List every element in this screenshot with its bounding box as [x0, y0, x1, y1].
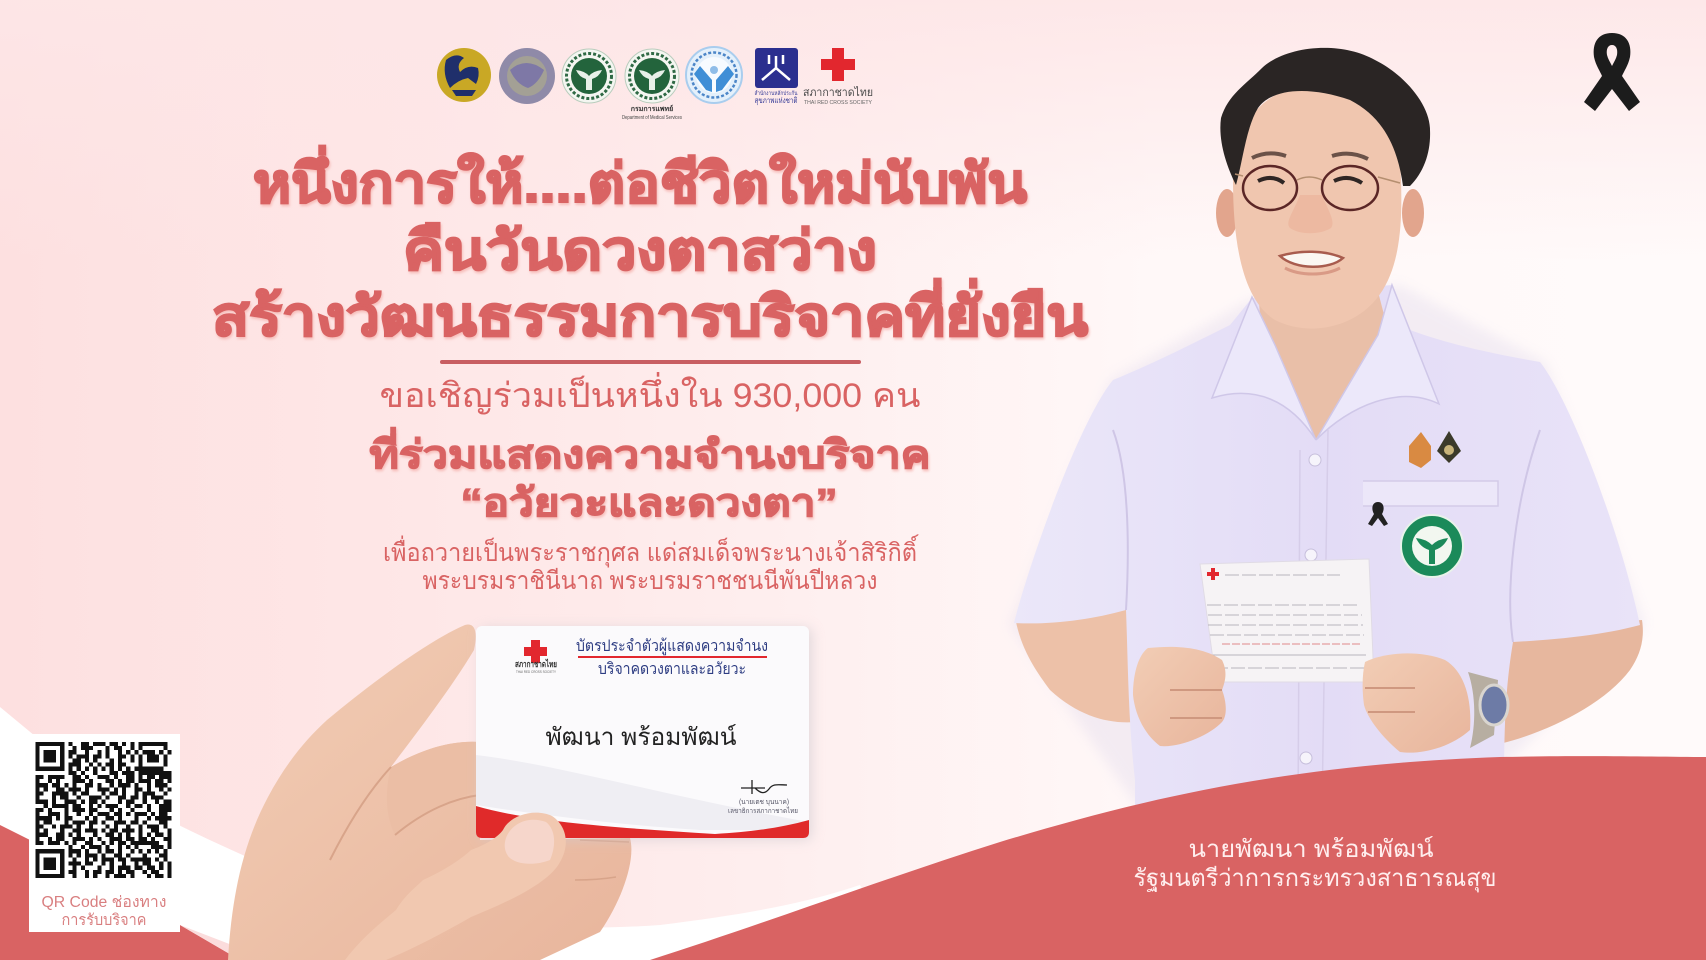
QR caption: QR Code ช่องทาง: [42, 894, 166, 911]
logo: Thai Red Cross: สภากาชาดไทย: [803, 86, 873, 99]
logo: Department of Medical Services green: Department of Medical Services: [622, 115, 682, 121]
card red swoosh: [476, 806, 809, 838]
logo: Department of Medical Services green: [622, 49, 682, 121]
right arm: [1470, 620, 1643, 748]
logo: Ministry of Public Health green: [562, 49, 616, 103]
logo: blue hands: [686, 47, 742, 103]
dedication text: พระบรมราชินีนาถ พระบรมราชชนนีพันปีหลวง: [422, 567, 878, 595]
pledge heading: “อวัยวะและดวงตา”: [460, 482, 838, 525]
logo: Thai Red Cross: [803, 48, 873, 106]
logo: Ministry seal purple: [499, 48, 555, 104]
donor card: [476, 626, 812, 840]
thumbnail: [505, 820, 554, 864]
donor card: THAI RED CROSS SOCIETY: [516, 669, 556, 674]
buttons: [1300, 454, 1321, 764]
donation form: [1200, 559, 1374, 682]
wristwatch: [1468, 672, 1508, 748]
eyes: [1258, 178, 1362, 183]
pins: [1409, 432, 1431, 468]
placket: [1298, 430, 1328, 810]
card heading: บัตรประจำตัวผู้แสดงความจำนง: [576, 637, 768, 656]
minister caption: นายพัฒนา พร้อมพัฒน์: [1188, 835, 1434, 863]
mouth: [1280, 252, 1343, 267]
pledge heading: [370, 427, 930, 525]
divider under title: [440, 360, 861, 364]
logo: NHSO navy square: สำนักงานหลักประกัน: [754, 90, 798, 97]
donor card: บริจาคดวงตาและอวัยวะ: [598, 661, 746, 678]
head: [1216, 48, 1430, 329]
invitation line: ขอเชิญร่วมเป็นหนึ่งใน 930,000 คน: [380, 372, 920, 415]
QR caption: [42, 894, 166, 929]
bottom left white swoosh and coral band: [0, 707, 900, 960]
sleeve folds: [1113, 430, 1540, 642]
collar: [1212, 297, 1316, 440]
minister caption: [1134, 835, 1496, 893]
shadow halo: [1010, 285, 1645, 810]
shirt: [1014, 285, 1640, 825]
left hand holding form: [1133, 647, 1226, 746]
QR caption: การรับบริจาค: [62, 912, 146, 929]
logo: NHSO navy square: [754, 48, 798, 105]
logo: NHSO navy square: สุขภาพแห่งชาติ: [754, 96, 798, 105]
glasses: [1235, 166, 1400, 210]
minister caption: รัฐมนตรีว่าการกระทรวงสาธารณสุข: [1134, 865, 1496, 893]
small ribbon pin: [1368, 502, 1388, 526]
icon: black mourning ribbon: [1584, 33, 1640, 111]
thumb: [345, 813, 566, 960]
QR code panel: [29, 734, 180, 932]
title: [212, 145, 1088, 347]
right hand holding form: [1363, 653, 1470, 753]
donor card: (นายเตช บุนนาค): [739, 799, 789, 806]
title: หนึ่งการให้....ต่อชีวิตใหม่นับพัน: [253, 145, 1027, 214]
title: สร้างวัฒนธรรมการบริจาคที่ยั่งยืน: [212, 278, 1088, 347]
pocket: [1363, 481, 1498, 506]
logo: Ministry seal yellow: [437, 48, 491, 102]
card logo: [524, 640, 547, 663]
hand holding card: [228, 624, 631, 960]
logo: Department of Medical Services green: กรมการแพทย์: [631, 104, 673, 113]
logos row: [437, 47, 873, 121]
dedication text: เพื่อถวายเป็นพระราชกุศล แด่สมเด็จพระนางเจ้าสิริกิติ์: [383, 534, 919, 568]
QR code: [36, 742, 172, 878]
neck: [1258, 280, 1388, 440]
palm and index finger: [228, 624, 631, 960]
left arm: [1016, 600, 1150, 722]
eyebrows: [1252, 153, 1368, 159]
middle fingers shading: [387, 742, 480, 835]
minister photo illustration: [1010, 48, 1645, 825]
signature: [741, 780, 787, 794]
logo: Thai Red Cross: THAI RED CROSS SOCIETY: [804, 100, 873, 106]
hair: [1220, 48, 1430, 186]
nose: [1288, 195, 1333, 233]
donor card: เลขาธิการสภากาชาดไทย: [728, 806, 798, 815]
dedication text: [383, 534, 919, 595]
ministry badge: [1401, 515, 1463, 577]
donor card: สภากาชาดไทย: [515, 658, 557, 669]
card holder name: พัฒนา พร้อมพัฒน์: [546, 723, 737, 751]
title: คืนวันดวงตาสว่าง: [403, 221, 877, 281]
pledge heading: ที่ร่วมแสดงความจำนงบริจาค: [370, 427, 930, 477]
bottom right coral wave: [650, 756, 1706, 960]
